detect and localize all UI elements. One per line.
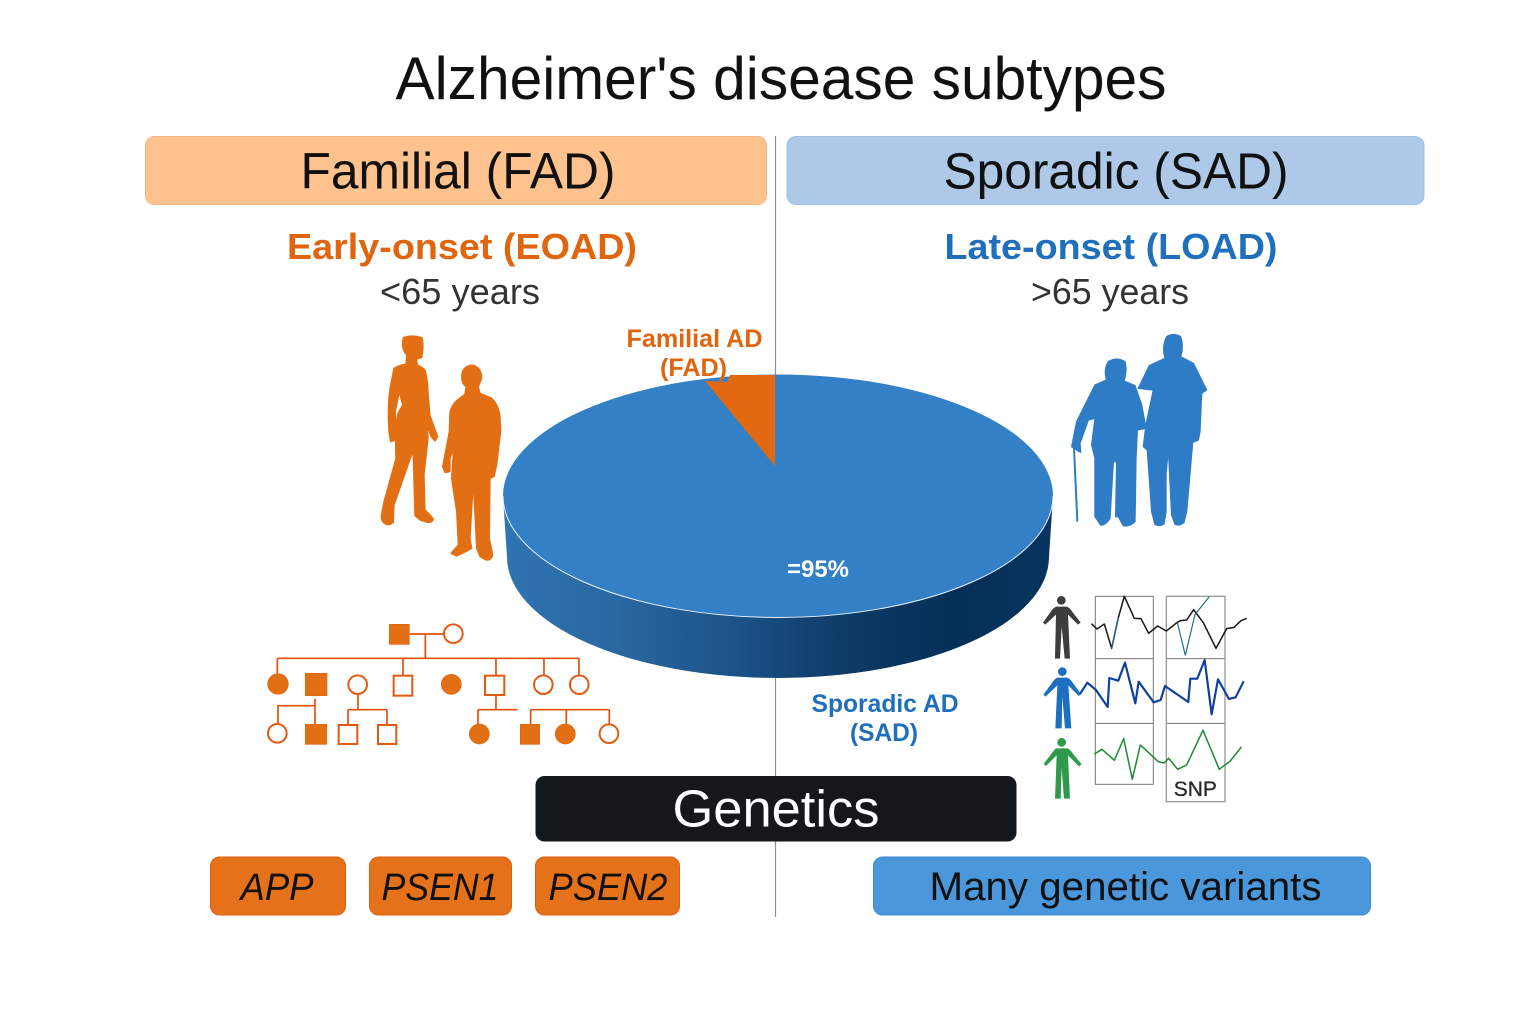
gene tag: APP: APP (239, 867, 314, 909)
pie top: sporadic share (503, 374, 1053, 618)
pie wedge: familial share (705, 375, 775, 466)
SNP label: SNP (1174, 778, 1217, 801)
pie value: =95% (787, 556, 849, 583)
icon: black person (1043, 596, 1081, 659)
late-onset heading: Late-onset (LOAD) (944, 226, 1278, 267)
panel: sporadic header (787, 136, 1424, 204)
navy signal (1080, 660, 1244, 714)
pie chart (503, 374, 1053, 678)
gene tag: PSEN2: PSEN2 (548, 867, 668, 909)
gene tag: APP (210, 857, 346, 915)
panel: genetics banner: Genetics (672, 780, 880, 838)
panel: familial header: Familial (FAD) (300, 142, 616, 200)
label: familial AD: Familial AD (626, 325, 762, 353)
icon: green person (1044, 738, 1082, 799)
gene tag: PSEN2 (536, 857, 680, 915)
early-onset heading (287, 226, 637, 312)
pie side wall (503, 496, 1053, 678)
SNP signal chart (1043, 596, 1247, 802)
gene tag: many genetic variants (874, 857, 1370, 915)
pedigree chart (268, 624, 618, 744)
SNP grid (1095, 596, 1225, 802)
gene tag: many genetic variants: Many genetic variants (930, 865, 1322, 909)
icon: younger couple silhouettes (381, 336, 501, 560)
pie rim highlight (503, 496, 1053, 617)
label: sporadic AD: (SAD) (850, 719, 918, 747)
icon: older couple silhouettes (1072, 334, 1207, 526)
late-onset heading: >65 years (1031, 271, 1189, 312)
late-onset heading (944, 226, 1278, 312)
teal signal (1112, 597, 1209, 655)
gene tag: PSEN1: PSEN1 (382, 867, 498, 909)
title: Alzheimer's disease subtypes (396, 45, 1166, 112)
black signal (1091, 596, 1247, 648)
label: familial AD (626, 325, 762, 382)
early-onset heading: Early-onset (EOAD) (287, 226, 637, 267)
center divider line (774, 136, 776, 917)
label: sporadic AD (812, 690, 958, 747)
panel: sporadic header: Sporadic (SAD) (944, 142, 1288, 200)
label: sporadic AD: Sporadic AD (812, 690, 958, 718)
gene tag: PSEN1 (370, 857, 512, 915)
panel: familial header (146, 136, 766, 204)
green signal (1094, 730, 1241, 779)
early-onset heading: <65 years (380, 271, 540, 312)
icon: blue person (1043, 667, 1081, 728)
panel: genetics banner (536, 776, 1016, 842)
label: familial AD: (FAD) (660, 354, 727, 382)
